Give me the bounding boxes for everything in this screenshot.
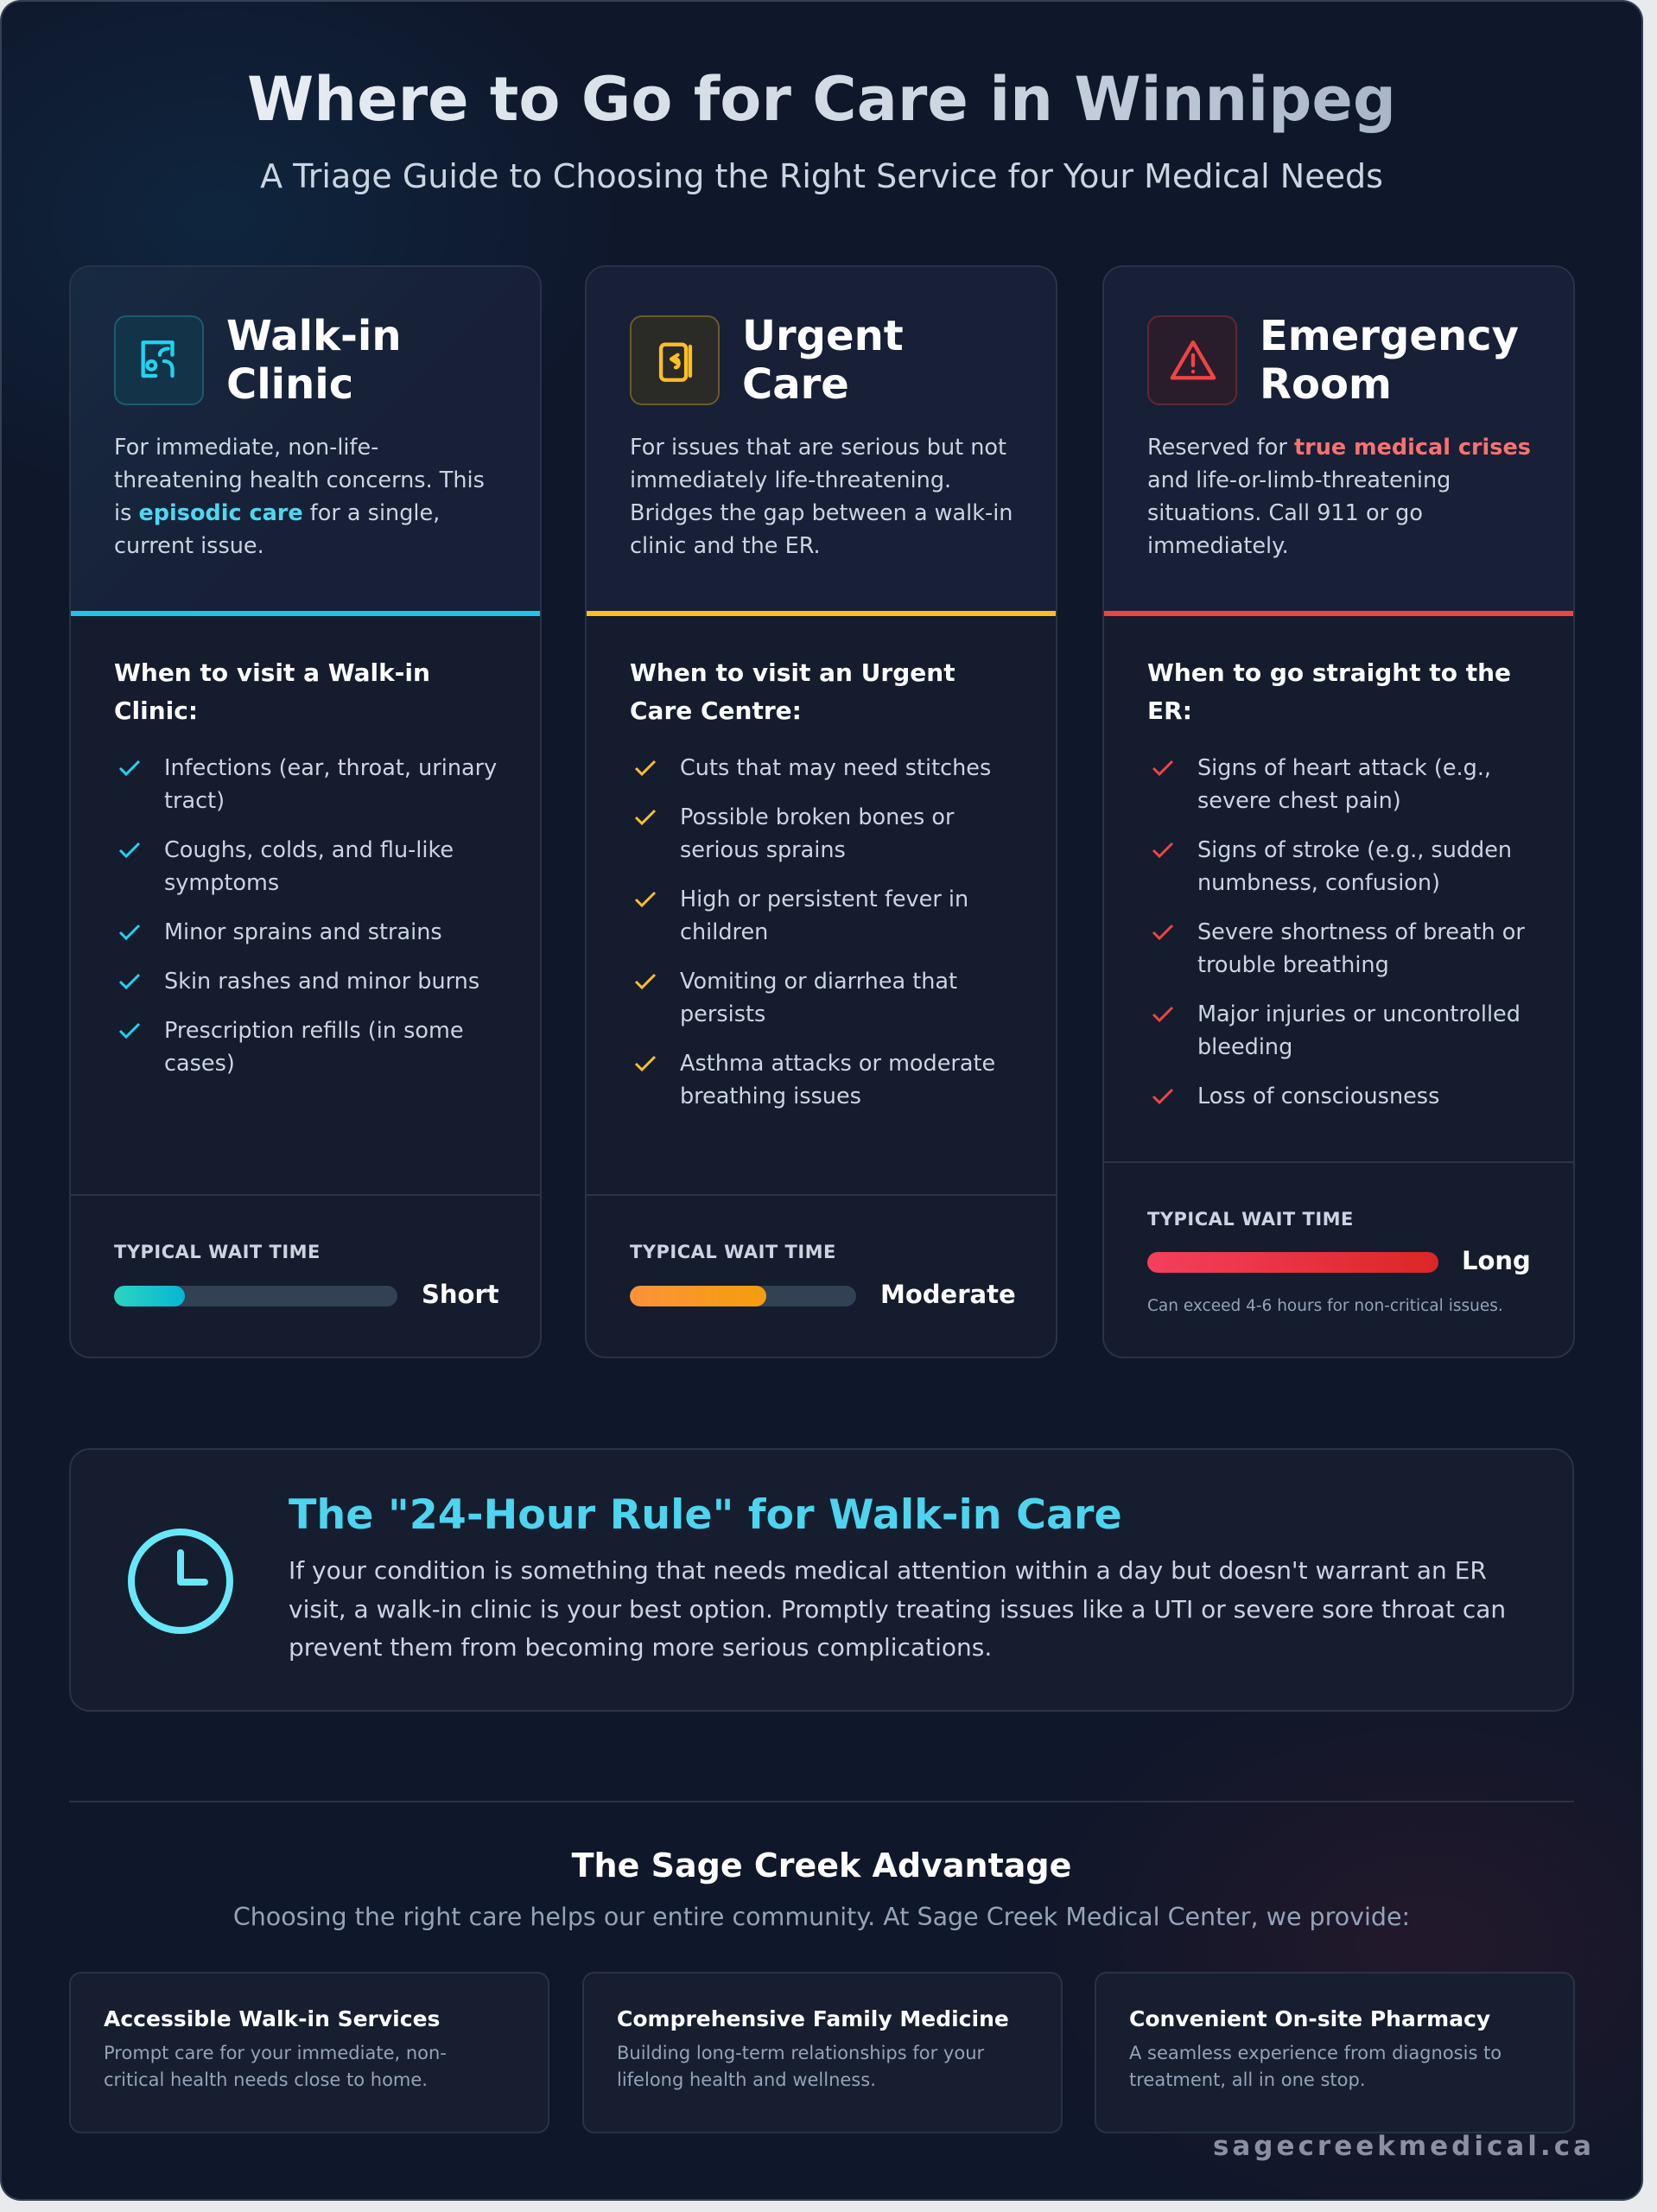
list: walk-in reasons: When to visit a Walk-in Clinic: [114, 658, 430, 725]
list: walk-in reasons: Minor sprains and strains [164, 919, 442, 945]
text: 24-hour rule body: If your condition is something that needs medical attention within a day but doesn't warrant an ER visit, a walk-in clinic is your best option. Promptly treating issues like a UTI or severe sore throat can prevent them from becoming more serious complications. [289, 1556, 1506, 1662]
title: Where to Go for Care in Winnipeg [247, 64, 1396, 135]
panel: family medicine: Comprehensive Family Medicine [617, 2006, 1009, 2031]
list: ER reasons: When to go straight to the ER: [1147, 658, 1511, 725]
list: ER reasons: Severe shortness of breath or trouble breathing [1197, 919, 1525, 978]
panel: family medicine: Building long-term relationships for your lifelong health and wellness. [617, 2043, 984, 2090]
title [0, 60, 1643, 138]
list: urgent reasons: Possible broken bones or serious sprains [680, 804, 954, 863]
panel: family medicine [582, 1972, 1063, 2133]
heading: walk-in clinic: Walk-in [226, 312, 402, 360]
list: ER reasons: Signs of heart attack (e.g., severe chest pain) [1197, 755, 1491, 814]
list: walk-in reasons: Prescription refills (in some cases) [164, 1018, 464, 1077]
text: advantage intro: Choosing the right care helps our entire community. At Sage Creek Medical Center, we provide: [233, 1903, 1410, 1931]
heading: urgent care: Care [742, 360, 849, 409]
panel: walk-in clinic [69, 265, 542, 1358]
list: urgent reasons: High or persistent fever in children [680, 887, 968, 945]
heading: walk-in clinic: Clinic [226, 360, 353, 409]
list: ER reasons: Signs of stroke (e.g., sudden numbness, confusion) [1197, 837, 1512, 896]
list: urgent reasons: Asthma attacks or moderate breathing issues [680, 1051, 995, 1109]
panel: pharmacy: Convenient On-site Pharmacy [1129, 2006, 1490, 2031]
panel: emergency room [1102, 265, 1575, 1358]
footer: website: sagecreekmedical.ca [1213, 2131, 1595, 2162]
heading: urgent care: Urgent [742, 312, 904, 360]
panel: urgent care: Moderate [880, 1280, 1016, 1309]
panel: walk-in clinic: Short [422, 1280, 499, 1309]
callout: 24-hour rule [69, 1448, 1574, 1712]
list: urgent reasons [630, 658, 995, 1109]
list: walk-in reasons [114, 658, 497, 1077]
wait time: moderate: TYPICAL WAIT TIME [630, 1242, 836, 1262]
heading: Sage Creek advantage: The Sage Creek Advantage [572, 1847, 1071, 1885]
list: walk-in reasons: Coughs, colds, and flu-like symptoms [164, 837, 454, 896]
panel: urgent care [585, 265, 1057, 1358]
panel: emergency room: Long [1462, 1246, 1531, 1275]
text: ER description: Reserved for true medical crises and life-or-limb-threatening situations. Call 911 or go immediately. [1147, 435, 1531, 559]
list: ER reasons [1147, 658, 1525, 1109]
panel: accessible walk-in [69, 1972, 549, 2133]
subtitle: A Triage Guide to Choosing the Right Service for Your Medical Needs [260, 157, 1383, 195]
text: walk-in description: For immediate, non-life-threatening health concerns. This is episodic care for a single, current issue. [114, 435, 485, 559]
wait time: short: TYPICAL WAIT TIME [114, 1242, 321, 1262]
list: urgent reasons: Cuts that may need stitches [680, 755, 991, 781]
heading: 24-hour rule: The "24-Hour Rule" for Walk-in Care [289, 1491, 1122, 1539]
panel: accessible walk-in: Prompt care for your immediate, non-critical health needs close to home. [104, 2043, 447, 2090]
panel: pharmacy [1095, 1972, 1575, 2133]
note: ER wait: Can exceed 4-6 hours for non-critical issues. [1147, 1297, 1503, 1315]
panel: pharmacy: A seamless experience from diagnosis to treatment, all in one stop. [1129, 2043, 1501, 2090]
text: urgent description: For issues that are serious but not immediately life-threatening. Bridges the gap between a walk-in clinic and the ER. [630, 435, 1013, 559]
heading: walk-in clinic [226, 312, 402, 409]
heading: emergency room: Room [1260, 360, 1392, 409]
panel: accessible walk-in: Accessible Walk-in Services [104, 2006, 440, 2031]
list: ER reasons: Major injuries or uncontrolled bleeding [1197, 1001, 1521, 1060]
list: walk-in reasons: Infections (ear, throat, urinary tract) [164, 755, 497, 814]
list: urgent reasons: When to visit an Urgent Care Centre: [630, 658, 955, 725]
list: ER reasons: Loss of consciousness [1197, 1084, 1439, 1109]
list: walk-in reasons: Skin rashes and minor burns [164, 969, 479, 995]
icon: clock [128, 1529, 233, 1634]
icon: urgent care [630, 315, 720, 405]
icon: walk-in clinic [114, 315, 204, 405]
heading: emergency room [1260, 312, 1519, 409]
wait time: long: TYPICAL WAIT TIME [1147, 1209, 1354, 1230]
heading: emergency room: Emergency [1260, 312, 1519, 360]
list: urgent reasons: Vomiting or diarrhea that persists [680, 969, 957, 1027]
heading: urgent care [742, 312, 904, 409]
icon: warning triangle [1147, 315, 1237, 405]
